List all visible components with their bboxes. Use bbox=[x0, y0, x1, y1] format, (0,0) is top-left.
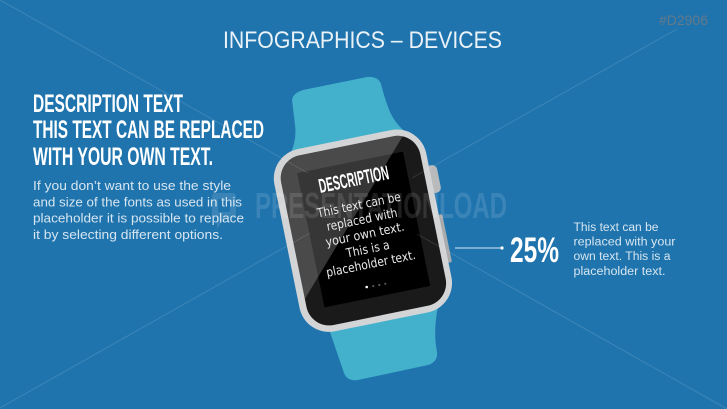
heading: description text: THIS TEXT CAN BE REPLACED bbox=[33, 116, 264, 144]
icon: crown bbox=[423, 164, 442, 194]
stat: 25%: 25% bbox=[510, 231, 559, 270]
screen text: replaced with bbox=[325, 205, 399, 234]
body text block: If you don’t want to use the style bbox=[33, 178, 231, 193]
screen heading: DESCRIPTION bbox=[317, 162, 391, 198]
screen text bbox=[313, 188, 417, 280]
body text block: it by selecting different options. bbox=[33, 227, 223, 242]
body text block: placeholder it is possible to replace bbox=[33, 210, 244, 226]
watermark pin icon bbox=[212, 193, 236, 229]
watermark text: PRESENTATIONLOAD bbox=[255, 185, 507, 226]
screen text: placeholder text. bbox=[325, 247, 417, 280]
stat description: This text can be bbox=[574, 222, 658, 234]
icon: watch screen bbox=[297, 152, 430, 307]
stat description bbox=[574, 222, 676, 278]
icon: bottom strap bbox=[328, 306, 438, 380]
body text block bbox=[33, 178, 244, 242]
icon: side button bbox=[435, 214, 452, 263]
screen text: your own text. bbox=[324, 219, 406, 249]
screen text: This is a bbox=[344, 237, 391, 261]
icon: watch case bbox=[268, 124, 457, 337]
watermark bbox=[212, 185, 507, 229]
heading: description text bbox=[33, 90, 264, 171]
heading: description text: WITH YOUR OWN TEXT. bbox=[33, 143, 213, 171]
icon: watch glass bbox=[277, 132, 450, 330]
connector arrow bbox=[455, 246, 504, 250]
stat description: replaced with your bbox=[574, 236, 676, 248]
stat description: own text. This is a bbox=[574, 251, 671, 263]
screen text: This text can be bbox=[315, 189, 402, 221]
page dots bbox=[365, 283, 386, 288]
icon: top strap bbox=[290, 77, 408, 155]
body text block: and size of the fonts as used in this bbox=[33, 194, 243, 210]
smartwatch illustration bbox=[268, 77, 457, 380]
heading: description text: DESCRIPTION TEXT bbox=[33, 90, 183, 118]
title: INFOGRAPHICS – DEVICES bbox=[223, 27, 502, 54]
stat description: placeholder text. bbox=[574, 266, 666, 278]
icon: glass highlight bbox=[280, 136, 402, 298]
product code: #D2906 bbox=[659, 12, 708, 28]
